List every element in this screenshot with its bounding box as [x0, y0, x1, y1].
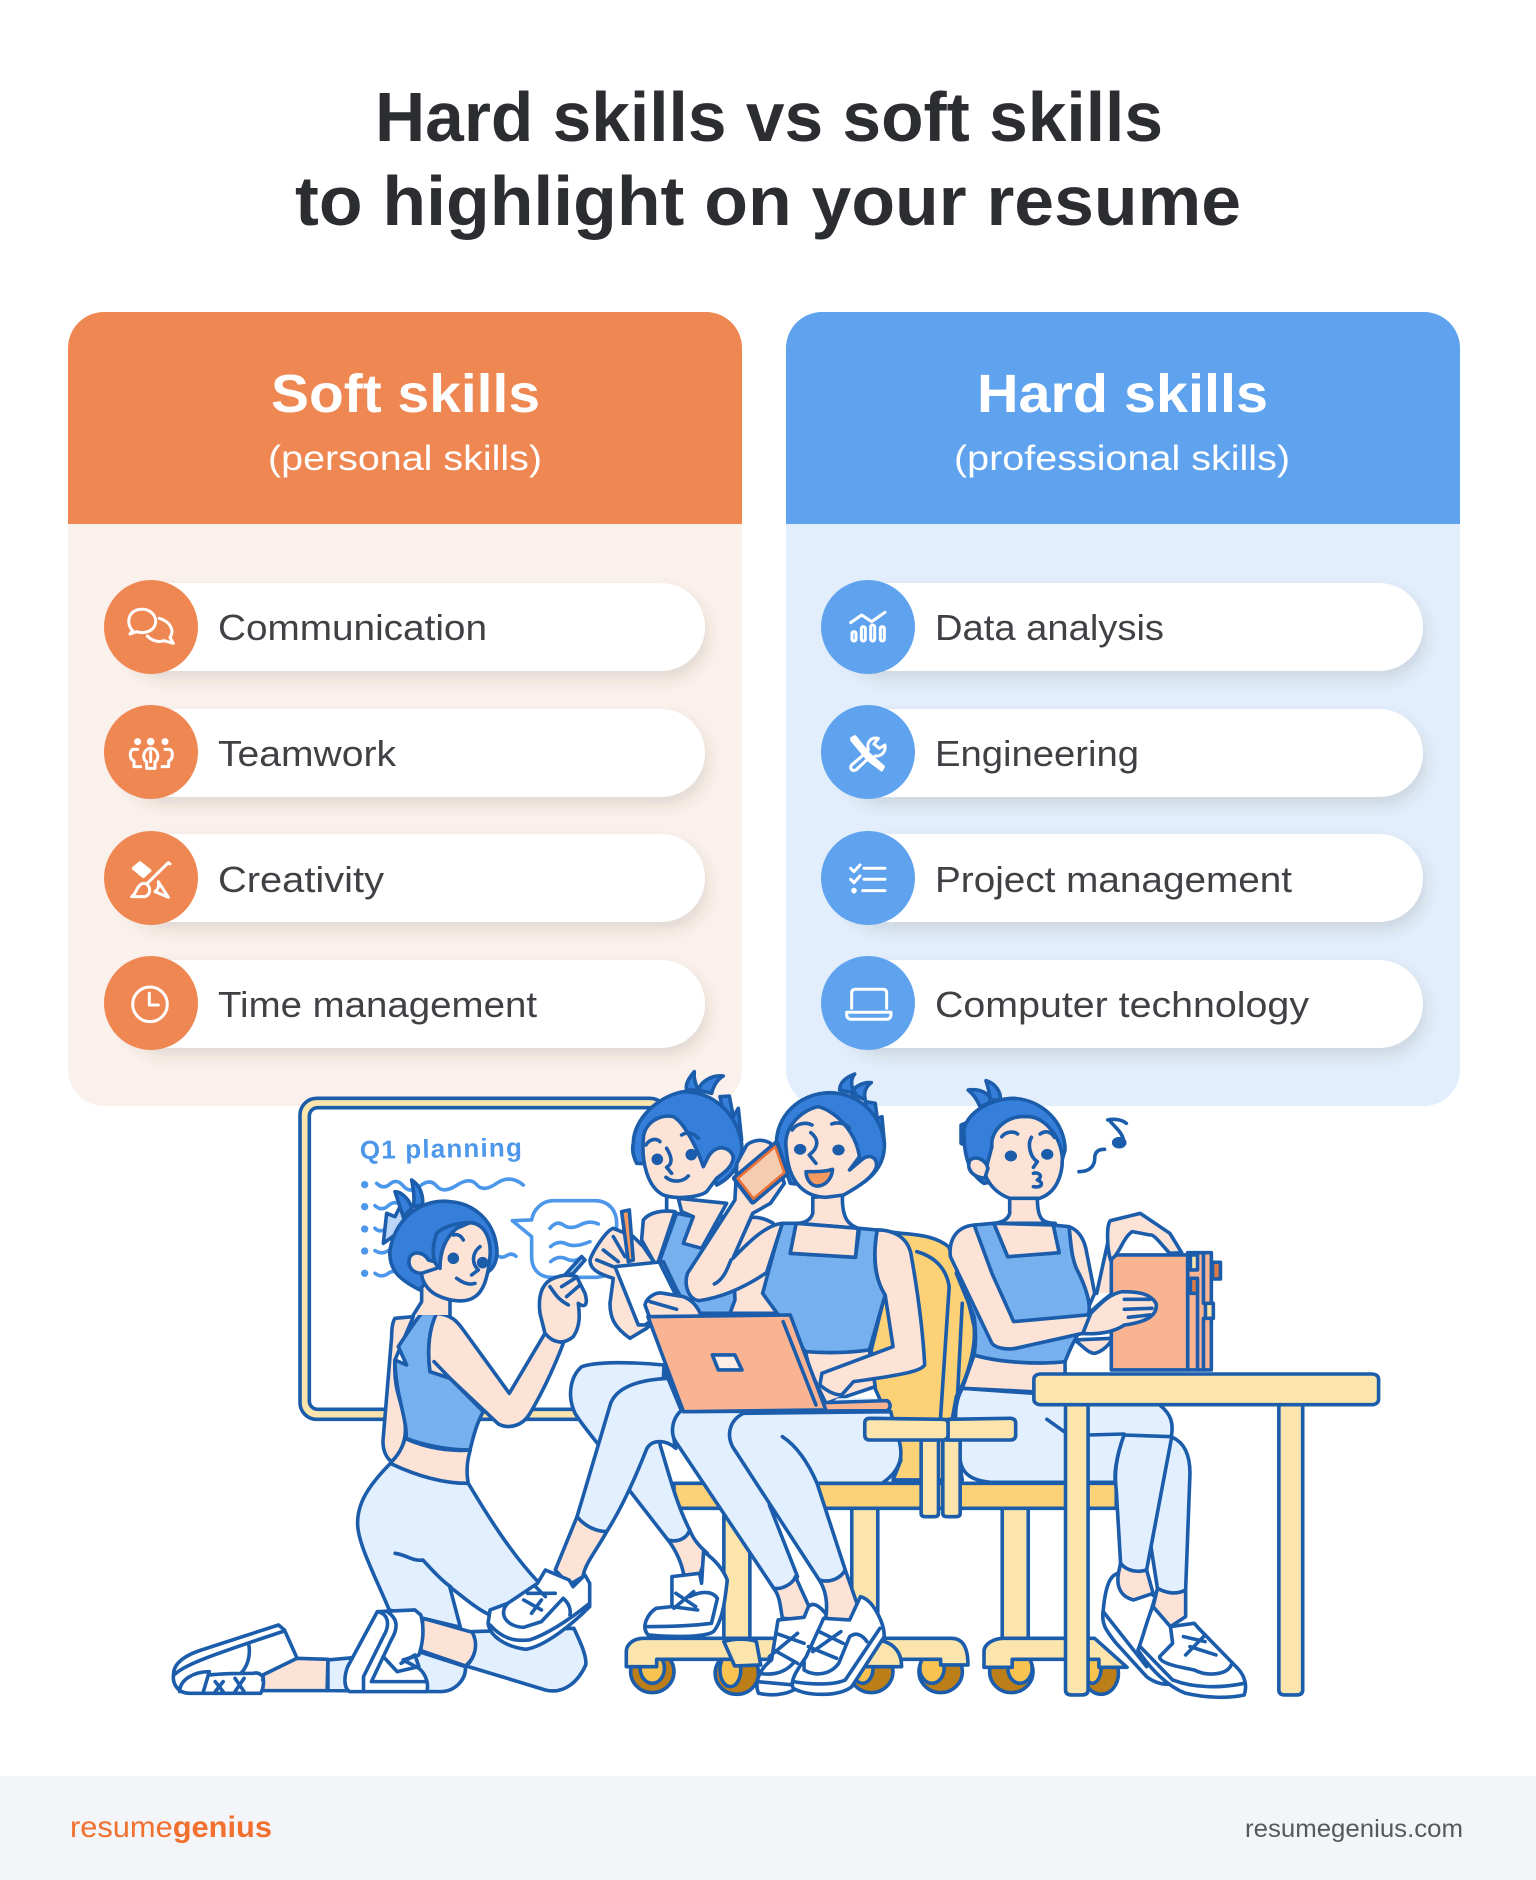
whiteboard: Q1 planning: [360, 1132, 522, 1165]
hard skills header: (professional skills): [954, 439, 1290, 478]
skill: project management: Project management: [935, 859, 1292, 900]
person: woman on phone with laptop: [648, 1074, 925, 1695]
laptop: [648, 1315, 890, 1412]
skill: project management: [821, 831, 1423, 925]
table: [1034, 1374, 1379, 1695]
soft skills header: [68, 312, 742, 524]
illustration: team at work: [173, 1072, 1379, 1697]
soft skills header: (personal skills): [268, 439, 542, 478]
chair armrests: [865, 1418, 1016, 1517]
skill: data analysis: Data analysis: [935, 607, 1164, 648]
skill: time management: Time management: [218, 984, 537, 1025]
skill: communication: Communication: [218, 607, 487, 648]
skill: communication: [104, 580, 705, 674]
soft skills header: Soft skills: [271, 364, 540, 424]
skill: creativity: [104, 831, 705, 925]
footer: [0, 1776, 1536, 1880]
skill: creativity: Creativity: [218, 859, 384, 900]
skill: teamwork: [104, 705, 705, 799]
music note: [1079, 1119, 1126, 1172]
skill: computer technology: Computer technology: [935, 984, 1309, 1025]
person: woman with notebook: [488, 1072, 780, 1649]
person: woman whistling with binder: [950, 1081, 1246, 1697]
chair: [626, 1230, 1127, 1694]
panel: hard skills: [786, 312, 1460, 1106]
binder: [1111, 1253, 1220, 1370]
skill: data analysis: [821, 580, 1423, 674]
title: to highlight on your resume: [295, 162, 1241, 240]
title: Hard skills vs soft skills: [375, 78, 1163, 156]
hard skills header: [786, 312, 1460, 524]
person: kneeling woman writing on board: [173, 1180, 586, 1693]
whiteboard: [300, 1098, 667, 1419]
hard skills header: Hard skills: [977, 364, 1268, 424]
website url: resumegenius.com: [1245, 1815, 1463, 1843]
skill: engineering: [821, 705, 1423, 799]
skill: engineering: Engineering: [935, 733, 1139, 774]
panel: soft skills: [68, 312, 742, 1106]
title: [295, 78, 1241, 240]
skill: computer technology: [821, 956, 1423, 1050]
skill: time management: [104, 956, 705, 1050]
skill: teamwork: Teamwork: [218, 733, 397, 774]
phone: [735, 1143, 786, 1202]
logo wordmark: resumegenius: [70, 1811, 272, 1844]
